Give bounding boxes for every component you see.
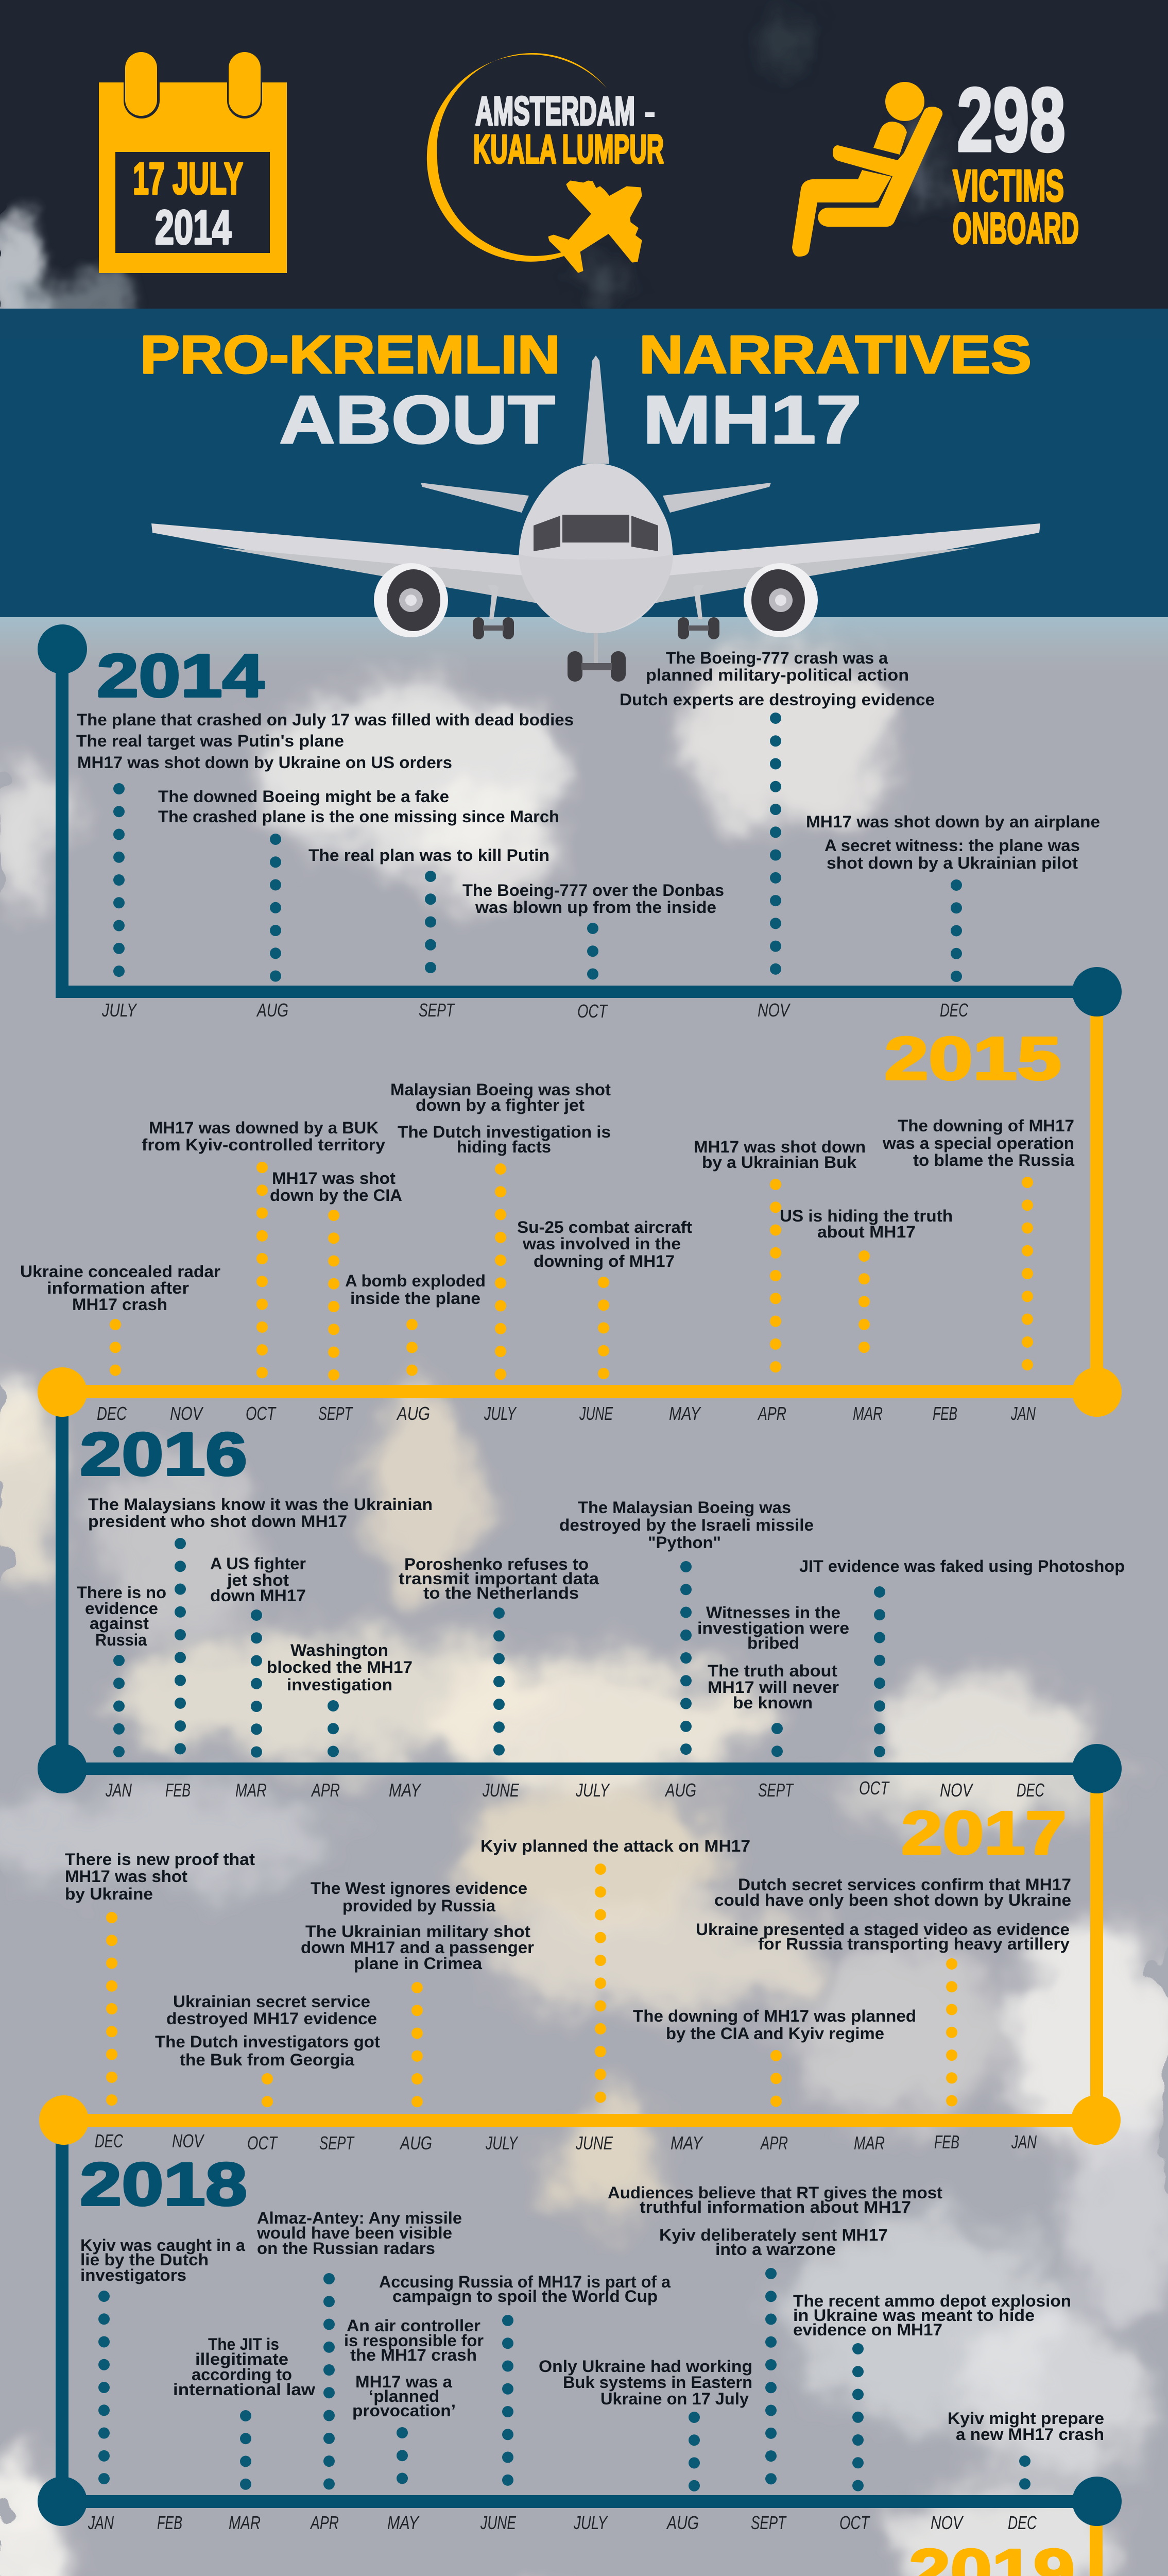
month labels 2018: DEC	[1008, 2512, 1037, 2533]
claims 2018: An air controller	[347, 2316, 480, 2335]
claims 2014: The Boeing-777 over the Donbas	[462, 881, 724, 900]
panel: 2017	[65, 1799, 1071, 2154]
claims 2016: blocked the MH17	[267, 1658, 413, 1676]
claims 2016: down MH17	[210, 1586, 306, 1605]
claims 2018: evidence on MH17	[793, 2320, 942, 2339]
claims 2016: investigation were	[697, 1619, 849, 1637]
claims 2014	[76, 649, 1100, 917]
claims 2016: JIT evidence was faked using Photoshop	[799, 1557, 1125, 1575]
claims 2014: A secret witness: the plane was	[825, 836, 1080, 855]
claims 2018: investigators	[80, 2266, 186, 2284]
claims 2014: shot down by a Ukrainian pilot	[827, 854, 1078, 872]
month labels 2016: MAY	[389, 1780, 422, 1801]
year heading 2017: 2017	[901, 1799, 1067, 1867]
title band	[0, 309, 1168, 617]
claims 2018: ‘planned	[369, 2387, 439, 2405]
month labels 2018: SEPT	[751, 2512, 787, 2533]
panel: 2016	[77, 1420, 1125, 1801]
claims 2018: lie by the Dutch	[80, 2250, 209, 2269]
claims 2015: US is hiding the truth	[780, 1207, 953, 1225]
dotted markers 2017	[112, 1869, 952, 2102]
claims 2014: The Boeing-777 crash was a	[666, 649, 888, 667]
claims 2015: about MH17	[817, 1223, 916, 1241]
icon: calendar date: 17 JULY	[133, 154, 243, 204]
icon: route arc with plane: KUALA LUMPUR	[473, 126, 664, 172]
claims 2015: hiding facts	[457, 1138, 551, 1156]
panel: 2015	[20, 1025, 1074, 1424]
claims 2015: down by a fighter jet	[416, 1096, 585, 1114]
month labels 2016: OCT	[859, 1777, 890, 1799]
month labels 2017: AUG	[399, 2132, 432, 2154]
claims 2016: Washington	[290, 1641, 388, 1659]
icon: calendar date: 2014	[155, 200, 231, 254]
claims 2017: Ukraine presented a staged video as evidence	[696, 1920, 1070, 1939]
month labels 2018: MAR	[229, 2512, 261, 2533]
panel: 2014	[76, 642, 1100, 1022]
claims 2017: plane in Crimea	[354, 1954, 482, 1973]
claims 2018: Only Ukraine had working	[539, 2357, 752, 2376]
claims 2016: Russia	[95, 1631, 147, 1649]
icon: route arc with plane: AMSTERDAM	[475, 88, 635, 133]
claims 2018: international law	[173, 2380, 315, 2399]
month labels 2018: FEB	[157, 2512, 182, 2533]
claims 2018: the MH17 crash	[350, 2346, 477, 2364]
icon: seated passenger with victim count: VICTIMS	[953, 161, 1064, 211]
claims 2018: into a warzone	[715, 2240, 836, 2259]
claims 2016: There is no	[77, 1583, 166, 1602]
month labels 2016: JUNE	[482, 1780, 520, 1801]
claims 2014: Dutch experts are destroying evidence	[620, 690, 935, 709]
month labels 2015: AUG	[396, 1403, 430, 1424]
claims 2016: bribed	[747, 1634, 799, 1652]
month labels 2015: OCT	[246, 1403, 277, 1424]
claims 2014: The downed Boeing might be a fake	[158, 787, 449, 806]
month labels 2015: FEB	[933, 1403, 957, 1424]
month labels 2014: OCT	[577, 1001, 608, 1022]
claims 2014: The plane that crashed on July 17 was filled with dead bodies	[77, 710, 574, 729]
month labels 2015: SEPT	[318, 1403, 353, 1424]
claims 2015: MH17 was downed by a BUK	[149, 1118, 379, 1137]
claims 2015: to blame the Russia	[913, 1151, 1074, 1170]
claims 2016: transmit important data	[399, 1569, 599, 1588]
claims 2015: MH17 was shot	[272, 1169, 396, 1188]
month labels 2017: JAN	[1011, 2131, 1037, 2153]
claims 2017: for Russia transporting heavy artillery	[758, 1935, 1070, 1953]
claims 2016: Witnesses in the	[706, 1603, 840, 1622]
month labels 2014	[101, 999, 969, 1022]
month labels 2016: SEPT	[758, 1780, 794, 1801]
claims 2015: downing of MH17	[534, 1252, 675, 1270]
claims 2016: president who shot down MH17	[88, 1512, 347, 1531]
month labels 2015: APR	[758, 1403, 786, 1424]
month labels 2018	[88, 2512, 1037, 2533]
claims 2015: information after	[47, 1279, 189, 1297]
month labels 2016: FEB	[165, 1780, 191, 1801]
month labels 2018: MAY	[387, 2512, 420, 2533]
month labels 2016: APR	[311, 1780, 340, 1801]
claims 2017: down MH17 and a passenger	[301, 1938, 534, 1957]
claims 2014: MH17 was shot down by an airplane	[806, 812, 1100, 831]
claims 2016: investigation	[287, 1675, 392, 1694]
title: PRO-KREMLIN	[140, 325, 560, 385]
claims 2018: in Ukraine was meant to hide	[793, 2306, 1035, 2325]
claims 2018: Almaz-Antey: Any missile	[257, 2209, 462, 2227]
title: ABOUT	[279, 382, 555, 457]
claims 2015: MH17 crash	[72, 1295, 167, 1314]
claims 2018: campaign to spoil the World Cup	[392, 2287, 658, 2306]
claims 2018: would have been visible	[256, 2224, 452, 2242]
claims 2018: provocation’	[352, 2401, 456, 2420]
claims 2016: jet shot	[227, 1571, 289, 1589]
claims 2018: according to	[192, 2365, 292, 2384]
claims 2014: planned military-political action	[646, 666, 909, 684]
claims 2017: The Dutch investigators got	[155, 2032, 380, 2051]
claims 2017: by the CIA and Kyiv regime	[666, 2024, 884, 2043]
icon: seated passenger with victim count	[792, 70, 1079, 257]
icon: calendar date	[99, 50, 287, 273]
title	[140, 325, 1032, 457]
month labels 2014: SEPT	[419, 999, 455, 1021]
month labels 2015: JAN	[1010, 1403, 1036, 1424]
claims 2014: The real plan was to kill Putin	[308, 846, 549, 865]
month labels 2017: OCT	[247, 2132, 278, 2154]
claims 2017: There is new proof that	[65, 1850, 255, 1869]
month labels 2017: NOV	[172, 2130, 204, 2151]
dotted markers 2018	[104, 2274, 1025, 2486]
claims 2015: was involved in the	[522, 1234, 681, 1253]
claims 2018: Buk systems in Eastern	[563, 2373, 752, 2392]
claims 2017: provided by Russia	[342, 1896, 495, 1915]
icon: seated passenger with victim count: 298	[957, 70, 1066, 171]
claims 2015: inside the plane	[350, 1289, 480, 1308]
claims 2017: Dutch secret services confirm that MH17	[738, 1875, 1071, 1894]
claims 2018: Ukraine on 17 July	[600, 2389, 749, 2408]
icon: route arc with plane	[427, 53, 664, 272]
illustration: airplane	[151, 355, 1040, 682]
month labels 2018: JAN	[88, 2512, 114, 2533]
claims 2017: could have only been shot down by Ukraine	[714, 1891, 1071, 1909]
claims 2016: The Malaysian Boeing was	[578, 1498, 791, 1517]
claims 2015: Ukraine concealed radar	[20, 1262, 220, 1281]
month labels 2014: AUG	[256, 999, 288, 1021]
claims 2015: MH17 was shot down	[694, 1138, 866, 1156]
claims 2017: the Buk from Georgia	[180, 2050, 354, 2069]
claims 2016	[77, 1495, 1125, 1712]
claims 2017: The Ukrainian military shot	[305, 1922, 530, 1941]
claims 2016: destroyed by the Israeli missile	[559, 1516, 814, 1534]
year heading 2018: 2018	[80, 2150, 247, 2218]
claims 2016: "Python"	[648, 1533, 721, 1552]
month labels 2017: JULY	[485, 2132, 519, 2154]
month labels 2016: JAN	[105, 1780, 132, 1801]
claims 2018	[80, 2183, 1104, 2444]
month labels 2016: MAR	[235, 1780, 267, 1801]
dotted markers 2014	[119, 718, 956, 977]
month labels 2017: JUNE	[575, 2132, 613, 2154]
claims 2017: MH17 was shot	[65, 1867, 187, 1886]
month labels 2014: JULY	[101, 999, 138, 1021]
claims 2014: The real target was Putin's plane	[76, 732, 344, 750]
claims 2016: A US fighter	[210, 1554, 306, 1573]
month labels 2015: MAR	[853, 1403, 883, 1424]
claims 2018: illegitimate	[195, 2350, 288, 2368]
claims 2015: Malaysian Boeing was shot	[390, 1080, 611, 1099]
claims 2018: a new MH17 crash	[956, 2425, 1104, 2444]
panel: 2018	[80, 2150, 1104, 2533]
claims 2018: on the Russian radars	[257, 2239, 435, 2258]
month labels 2014: NOV	[758, 999, 791, 1021]
month labels 2017: DEC	[95, 2130, 124, 2151]
claims 2018: The JIT is	[208, 2335, 279, 2353]
month labels 2015	[97, 1403, 1036, 1424]
claims 2015: Su-25 combat aircraft	[517, 1218, 692, 1236]
month labels 2016: AUG	[664, 1780, 696, 1801]
title: MH17	[643, 382, 862, 457]
claims 2016: be known	[733, 1693, 813, 1712]
month labels 2016: DEC	[1017, 1780, 1045, 1801]
month labels 2015: JUNE	[579, 1403, 613, 1424]
month labels 2017: APR	[760, 2132, 788, 2154]
claims 2017	[65, 1837, 1071, 2069]
claims 2018: Audiences believe that RT gives the most	[608, 2183, 942, 2202]
title: NARRATIVES	[639, 325, 1032, 385]
month labels 2017: MAR	[854, 2132, 885, 2154]
month labels 2015: MAY	[669, 1403, 701, 1424]
year heading 2016: 2016	[80, 1420, 247, 1488]
claims 2018: Kyiv deliberately sent MH17	[659, 2226, 888, 2244]
claims 2014: was blown up from the inside	[475, 898, 716, 917]
month labels 2018: JUNE	[480, 2512, 517, 2533]
claims 2016: evidence	[85, 1599, 158, 1618]
claims 2017: Ukrainian secret service	[173, 1992, 370, 2011]
month labels 2017: FEB	[934, 2131, 959, 2153]
month labels 2017: SEPT	[319, 2132, 355, 2154]
timeline track: connecting lines and nodes	[38, 624, 1124, 2576]
claims 2015: down by the CIA	[270, 1186, 402, 1205]
month labels 2016	[105, 1777, 1045, 1801]
month labels 2014: DEC	[940, 999, 969, 1021]
month labels 2018: JULY	[573, 2512, 608, 2533]
claims 2016: The truth about	[708, 1662, 837, 1680]
claims 2015: A bomb exploded	[345, 1272, 486, 1290]
month labels 2018: NOV	[931, 2512, 964, 2533]
claims 2015: from Kyiv-controlled territory	[142, 1136, 385, 1154]
claims 2014: MH17 was shot down by Ukraine on US orders	[77, 753, 452, 772]
claims 2017: destroyed MH17 evidence	[166, 2009, 377, 2028]
claims 2018: Accusing Russia of MH17 is part of a	[379, 2273, 671, 2291]
claims 2016: The Malaysians know it was the Ukrainian	[88, 1495, 433, 1514]
claims 2018: Kyiv was caught in a	[80, 2236, 245, 2255]
claims 2016: MH17 will never	[708, 1678, 839, 1697]
claims 2016: Poroshenko refuses to	[404, 1555, 589, 1573]
dotted markers 2016	[119, 1544, 880, 1752]
month labels 2015: NOV	[170, 1403, 203, 1424]
month labels 2016: NOV	[940, 1780, 973, 1801]
claims 2017: The downing of MH17 was planned	[633, 2007, 916, 2025]
claims 2016: to the Netherlands	[423, 1584, 579, 1602]
year heading 2015: 2015	[884, 1025, 1061, 1093]
claims 2015	[20, 1080, 1074, 1314]
claims 2017: by Ukraine	[65, 1885, 153, 1903]
dotted markers 2015	[115, 1167, 1027, 1376]
claims 2018: MH17 was a	[355, 2372, 452, 2391]
year heading 2014: 2014	[97, 642, 264, 710]
claims 2014: The crashed plane is the one missing since March	[158, 807, 559, 826]
month labels 2017: MAY	[671, 2132, 703, 2154]
month labels 2015: JULY	[484, 1403, 517, 1424]
claims 2016: against	[90, 1614, 149, 1633]
claims 2018: Kyiv might prepare	[948, 2409, 1104, 2428]
month labels 2018: OCT	[839, 2512, 870, 2533]
claims 2015: was a special operation	[882, 1134, 1074, 1153]
claims 2018: truthful information about MH17	[640, 2198, 911, 2216]
claims 2017: The West ignores evidence	[311, 1879, 527, 1897]
header band	[0, 0, 1168, 330]
claims 2015: The downing of MH17	[898, 1116, 1074, 1135]
month labels 2018: APR	[310, 2512, 339, 2533]
month labels 2017	[95, 2130, 1037, 2154]
claims 2015: by a Ukrainian Buk	[702, 1153, 856, 1172]
claims 2017: Kyiv planned the attack on MH17	[480, 1837, 750, 1855]
claims 2015: The Dutch investigation is	[398, 1123, 611, 1141]
claims 2018: The recent ammo depot explosion	[793, 2292, 1071, 2310]
month labels 2018: AUG	[666, 2512, 699, 2533]
claims 2018: is responsible for	[344, 2331, 484, 2350]
month labels 2015: DEC	[97, 1403, 127, 1424]
month labels 2016: JULY	[575, 1780, 610, 1801]
